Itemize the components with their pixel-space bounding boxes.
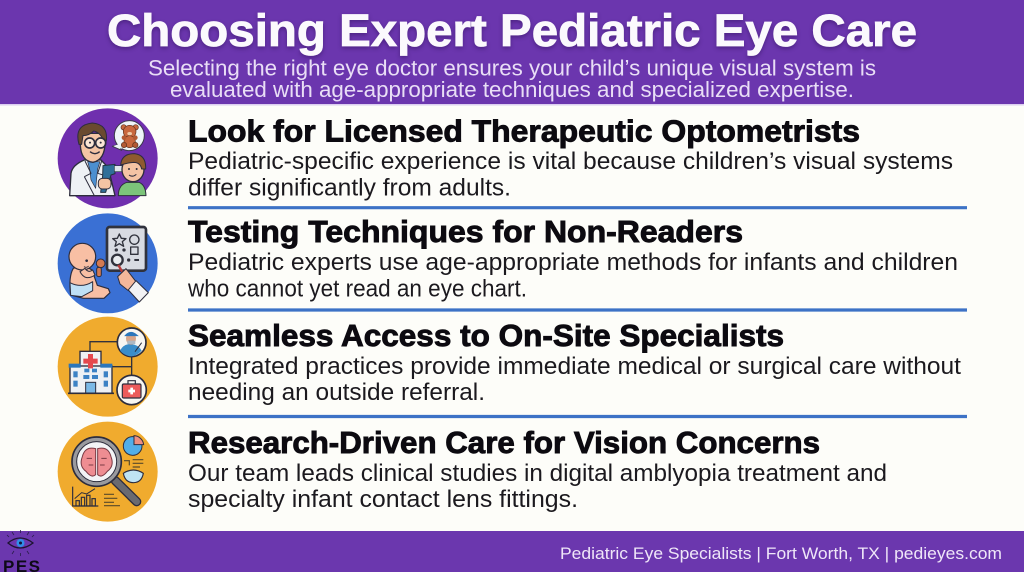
hand with occluder [112,255,148,302]
icon: research magnifier with brain [58,422,158,522]
item 3 text: Seamless Access to On-Site Specialists [188,318,784,353]
bar chart [73,487,98,506]
item 4 text [188,425,887,513]
item 3 text: needing an outside referral. [188,379,485,406]
child [118,154,146,196]
first aid kit badge [117,375,146,405]
contact lens [123,470,143,483]
item 2 text [187,214,958,302]
item 4 text: Our team leads clinical studies in digital amblyopia treatment and [188,460,887,487]
subtitle [148,56,876,102]
item 2 text: Pediatric experts use age-appropriate methods for infants and children [188,249,958,276]
item 1 text: Pediatric-specific experience is vital because children’s visual systems [188,148,953,175]
item 2 text: Testing Techniques for Non-Readers [188,214,743,249]
eye chart tablet [107,227,146,271]
icon: hospital with on-site specialists [58,317,158,417]
icon: baby and eye chart [58,213,158,313]
icon: doctor examining child [58,108,158,208]
logo: PES eye [3,530,42,572]
item 1 text: Look for Licensed Therapeutic Optometrists [188,114,860,148]
footer text: Pediatric Eye Specialists | Fort Worth, TX | pedieyes.com [560,544,1002,563]
item 1 text: differ significantly from adults. [188,174,511,202]
speech bubble with teddy bear [112,121,144,151]
surgeon badge [117,328,146,357]
baby [69,243,110,298]
subtitle: evaluated with age-appropriate techniques and specialized expertise. [170,77,854,102]
otoscope [98,164,122,192]
item 3 text [188,318,961,406]
item 2 text: who cannot yet read an eye chart. [187,276,527,302]
item 4 text: Research-Driven Care for Vision Concerns [188,425,820,460]
pie chart [123,436,144,455]
subtitle: Selecting the right eye doctor ensures your child’s unique visual system is [148,56,876,80]
magnifier with brain [72,437,137,502]
hospital building [68,351,114,393]
doctor [70,123,115,196]
item 3 text: Integrated practices provide immediate medical or surgical care without [188,353,961,380]
item 1 text [188,114,953,202]
title: Choosing Expert Pediatric Eye Care [107,5,917,56]
item 4 text: specialty infant contact lens fittings. [188,486,578,513]
footer bar [0,531,1024,572]
header banner [0,0,1024,106]
